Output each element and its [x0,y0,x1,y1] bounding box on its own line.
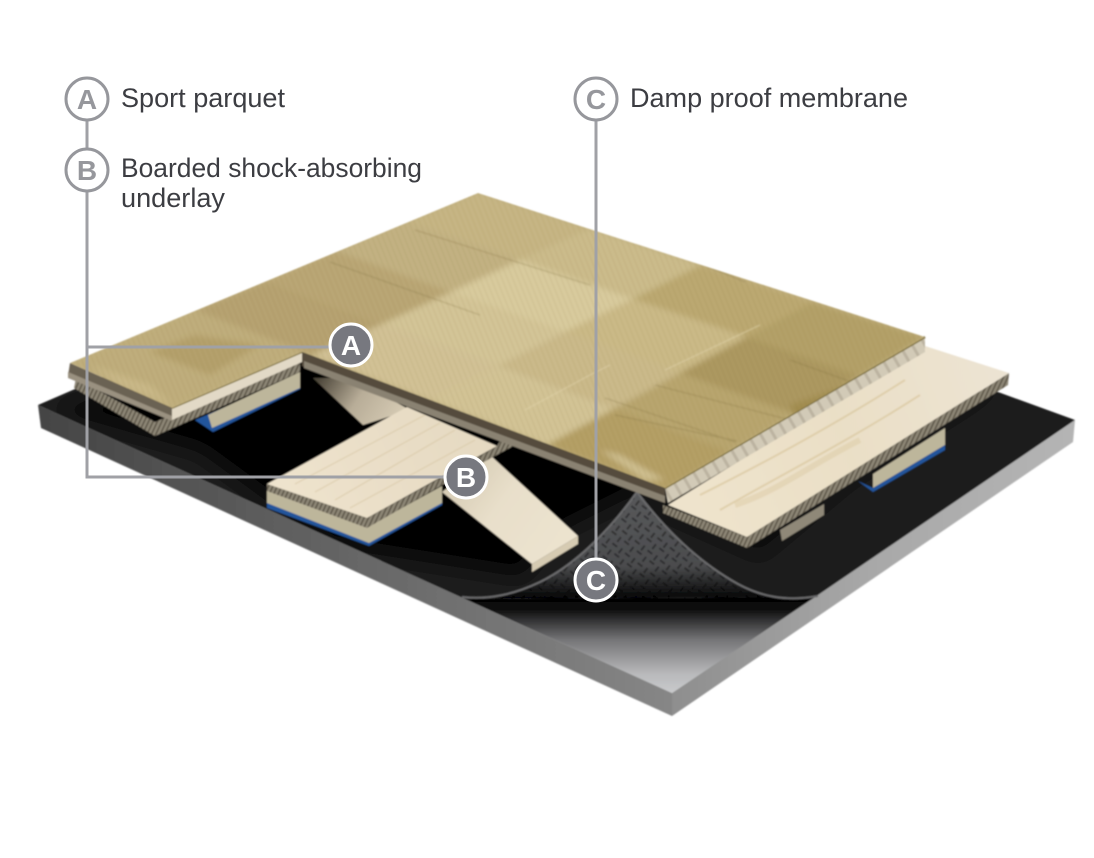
legend item A: Sport parquet: Sport parquet [121,83,285,113]
legend item A: Sport parquet [66,78,285,120]
callout A on parquet: A [341,330,361,361]
legend item C: Damp proof membrane [575,78,908,120]
shock absorbing pad under board B [267,486,442,546]
concrete subfloor slab [38,405,1075,716]
legend item C: Damp proof membrane: Damp proof membrane [630,83,908,113]
leader lines connecting legend to callouts [87,120,596,560]
legend item B: Boarded shock-absorbing underlay: underlay [121,183,225,213]
parquet edge thickness [68,337,925,503]
callout B on underlay: B [456,462,476,493]
legend item C: Damp proof membrane: C [586,84,606,115]
back joist plank [313,378,410,425]
peeled membrane corner with tread pattern [462,492,818,599]
legend item A: Sport parquet: A [77,84,97,115]
callout B on underlay [445,456,487,498]
boarded underlay right section [663,346,1009,548]
floor construction cutaway illustration [38,193,1075,716]
callout C on membrane: C [586,565,606,596]
boarded underlay section B [267,407,515,528]
callout A on parquet [330,324,372,366]
long plank under board B [442,455,578,572]
sport parquet top surface [70,193,925,490]
callout C on membrane [575,559,617,601]
legend item B: Boarded shock-absorbing underlay: B [77,155,97,186]
left underlay section with pad [74,360,300,436]
legend item B: Boarded shock-absorbing underlay [66,149,422,213]
legend item B: Boarded shock-absorbing underlay: Boarded shock-absorbing [121,153,422,183]
damp proof membrane, black sheet [38,335,1075,599]
